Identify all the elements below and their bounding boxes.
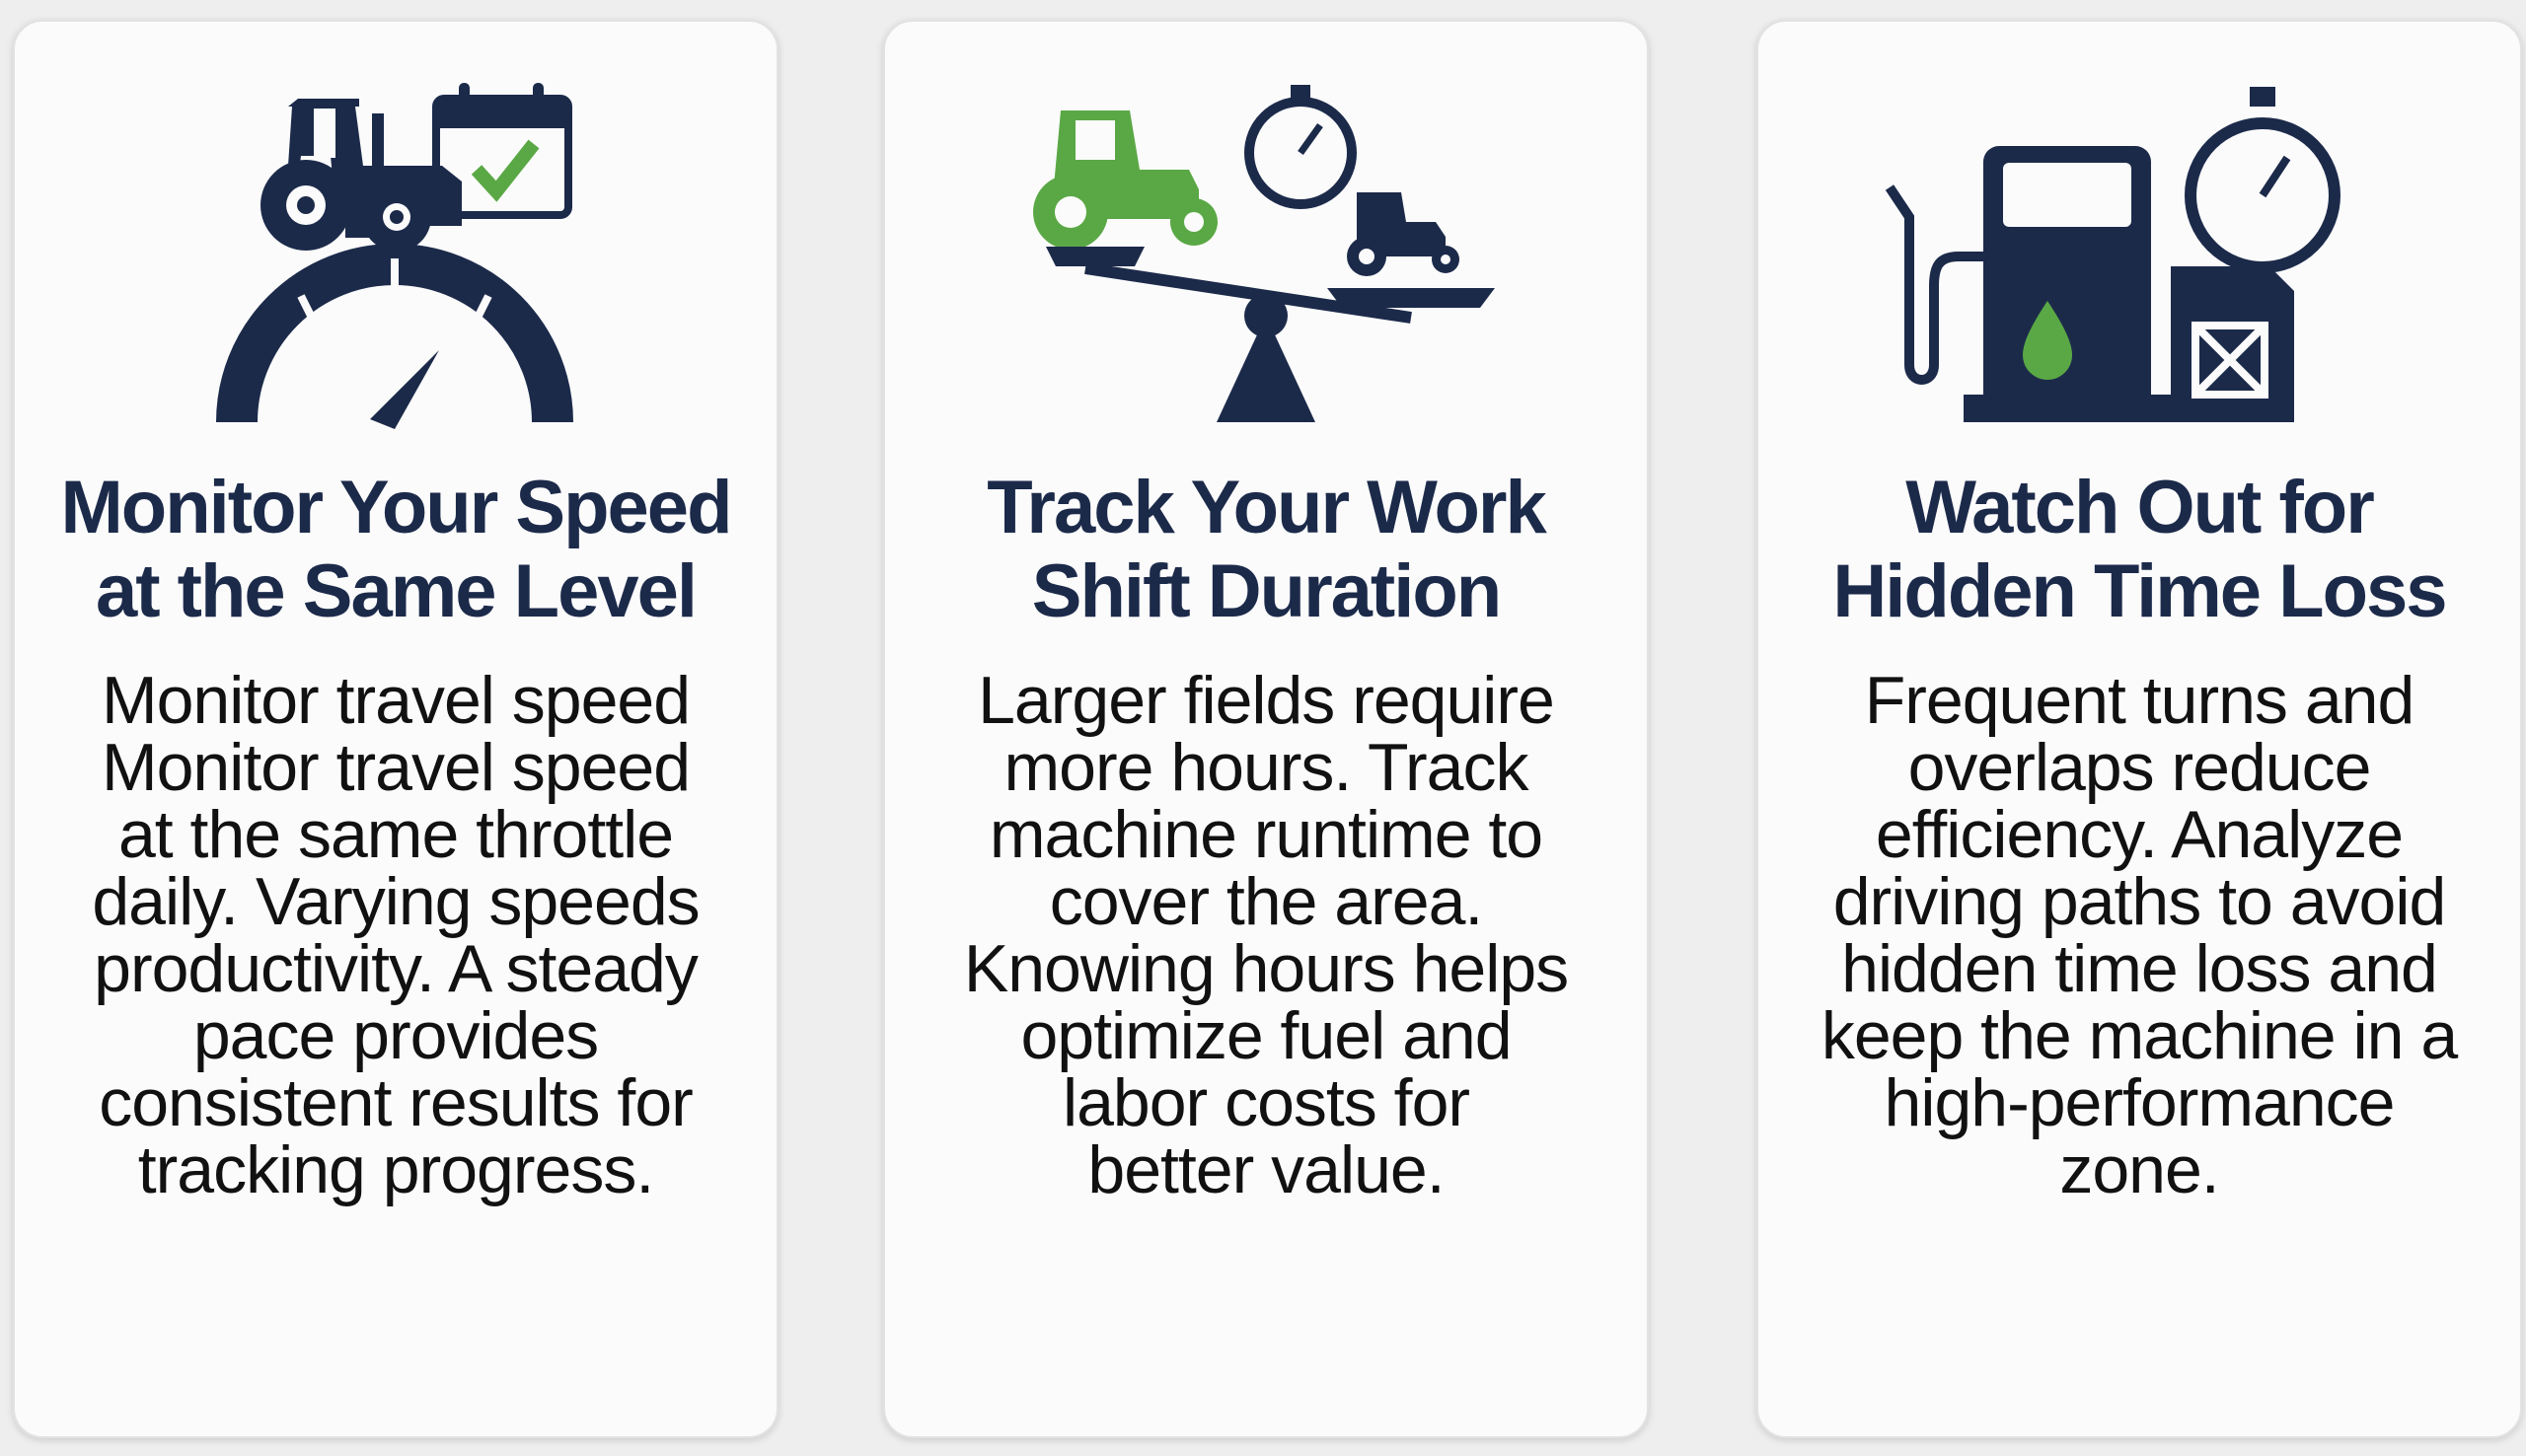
text block: track shift: better value. [1087, 1132, 1445, 1207]
text block: hidden time loss: keep the machine in a [1821, 998, 2457, 1073]
text block: hidden time loss: Frequent turns and [1865, 663, 2414, 738]
text block: track shift: machine runtime to [990, 797, 1542, 872]
icon: scale with tractors and stopwatch [1033, 85, 1495, 422]
text block: monitor speed: tracking progress. [138, 1132, 653, 1207]
text block: monitor speed: at the same throttle [118, 797, 673, 872]
text block: track shift: cover the area. [1050, 864, 1482, 939]
panel: track shift [883, 20, 1649, 1438]
heading: hidden time loss: Watch Out for [1905, 466, 2373, 549]
panel: hidden time loss [1756, 20, 2522, 1438]
heading: monitor speed: Monitor Your Speed [61, 466, 730, 549]
text block: track shift: more hours. Track [1004, 730, 1527, 805]
text block: track shift [964, 663, 1568, 1207]
text block: monitor speed: daily. Varying speeds [92, 864, 700, 939]
text block: hidden time loss: zone. [2059, 1132, 2219, 1207]
text block: monitor speed: Monitor travel speed [102, 663, 690, 738]
text block: hidden time loss: high-performance [1885, 1065, 2394, 1140]
panel: monitor speed [13, 20, 779, 1438]
text block: track shift: labor costs for [1063, 1065, 1469, 1140]
heading: track shift [987, 466, 1547, 633]
icon: fuel pump, stopwatch and jerrycan [1890, 87, 2335, 422]
text block: hidden time loss [1821, 663, 2459, 1207]
text block: hidden time loss: overlaps reduce [1908, 730, 2370, 805]
heading: track shift: Shift Duration [1032, 549, 1500, 633]
heading: monitor speed: at the Same Level [96, 549, 696, 633]
text block: hidden time loss: efficiency. Analyze [1876, 797, 2403, 872]
text block: track shift: optimize fuel and [1020, 998, 1512, 1073]
heading: track shift: Track Your Work [987, 466, 1545, 549]
heading: hidden time loss: Hidden Time Loss [1832, 549, 2446, 633]
text block: hidden time loss: hidden time loss and [1841, 931, 2437, 1006]
text block: monitor speed: pace provides [193, 998, 598, 1073]
text block: hidden time loss: driving paths to avoid [1833, 864, 2445, 939]
heading: monitor speed [61, 466, 730, 633]
text block: monitor speed: productivity. A steady [94, 931, 698, 1006]
heading: hidden time loss [1832, 466, 2446, 633]
icon: tractor with calendar and gauge [237, 83, 568, 429]
text block: track shift: Knowing hours helps [964, 931, 1568, 1006]
text block: monitor speed: Monitor travel speed [102, 730, 690, 805]
text block: track shift: Larger fields require [978, 663, 1554, 738]
text block: monitor speed: consistent results for [99, 1065, 693, 1140]
text block: monitor speed [92, 663, 700, 1207]
